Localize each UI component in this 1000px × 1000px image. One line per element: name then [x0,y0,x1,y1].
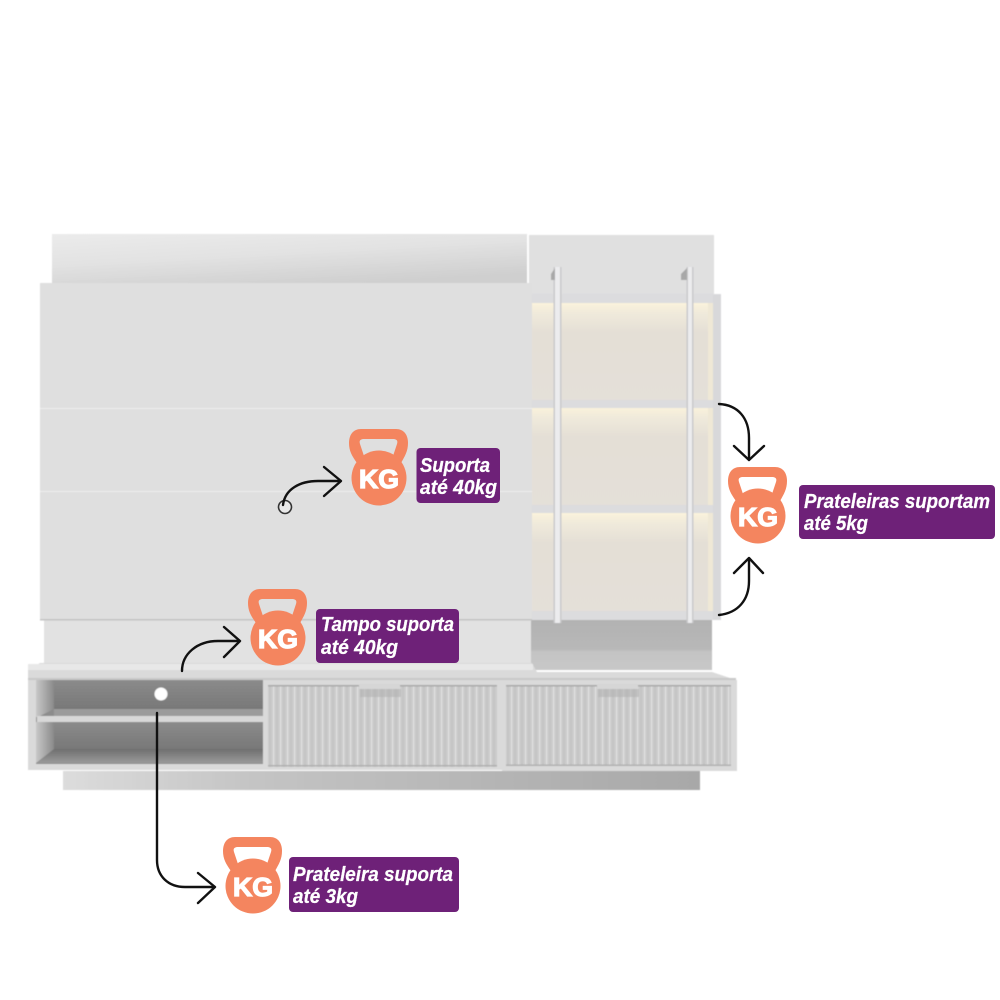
arrow: lower shelves [719,558,763,615]
label: Prateleira suporta até 3kg: até 3kg [293,886,358,908]
icon: kettlebell 40kg panel [349,429,408,506]
icon: kettlebell 3kg: KG [233,872,273,902]
label: Prateleira suporta até 3kg [289,857,459,912]
upper back panel [52,234,527,286]
icon: kettlebell 5kg [728,467,787,544]
cable hole [154,688,168,700]
label: Prateleiras suportam até 5kg [799,485,995,539]
furniture: TV panel and console [28,234,737,790]
label: Prateleiras suportam até 5kg: Prateleiras suportam [804,491,990,513]
right back panel [529,235,714,297]
icon: kettlebell 40kg top: KG [258,624,298,654]
label: Suporta até 40kg: Suporta [420,455,490,477]
plinth [63,771,700,790]
icon: kettlebell 5kg: KG [738,502,778,532]
label: Suporta até 40kg: até 40kg [420,477,497,499]
label: Tampo suporta até 40kg: até 40kg [321,637,398,659]
icon: kettlebell 40kg panel: KG [359,464,399,494]
right drawer [502,680,737,771]
shelf unit back with light [532,303,713,612]
label: Tampo suporta até 40kg: Tampo suporta [321,614,454,636]
panel base [44,618,531,664]
arrow: compartment shelf [157,713,215,903]
label: Prateleiras suportam até 5kg: até 5kg [804,513,868,535]
open compartment [36,680,263,764]
icon: kettlebell 3kg [223,837,282,914]
console top [28,663,736,770]
label: Suporta até 40kg [416,448,500,503]
arrow: upper shelves [719,404,764,460]
lower right wall [531,618,712,670]
left drawer [264,680,500,770]
icon: kettlebell 40kg top [248,589,307,666]
right post [713,295,721,620]
glass shelves [532,294,721,620]
arrow: panel support [278,467,341,514]
ladder uprights [551,267,694,623]
label: Prateleira suporta até 3kg: Prateleira suporta [293,864,453,886]
main wall panel [40,283,532,620]
label: Tampo suporta até 40kg [316,609,459,663]
arrow: console top [182,627,240,671]
